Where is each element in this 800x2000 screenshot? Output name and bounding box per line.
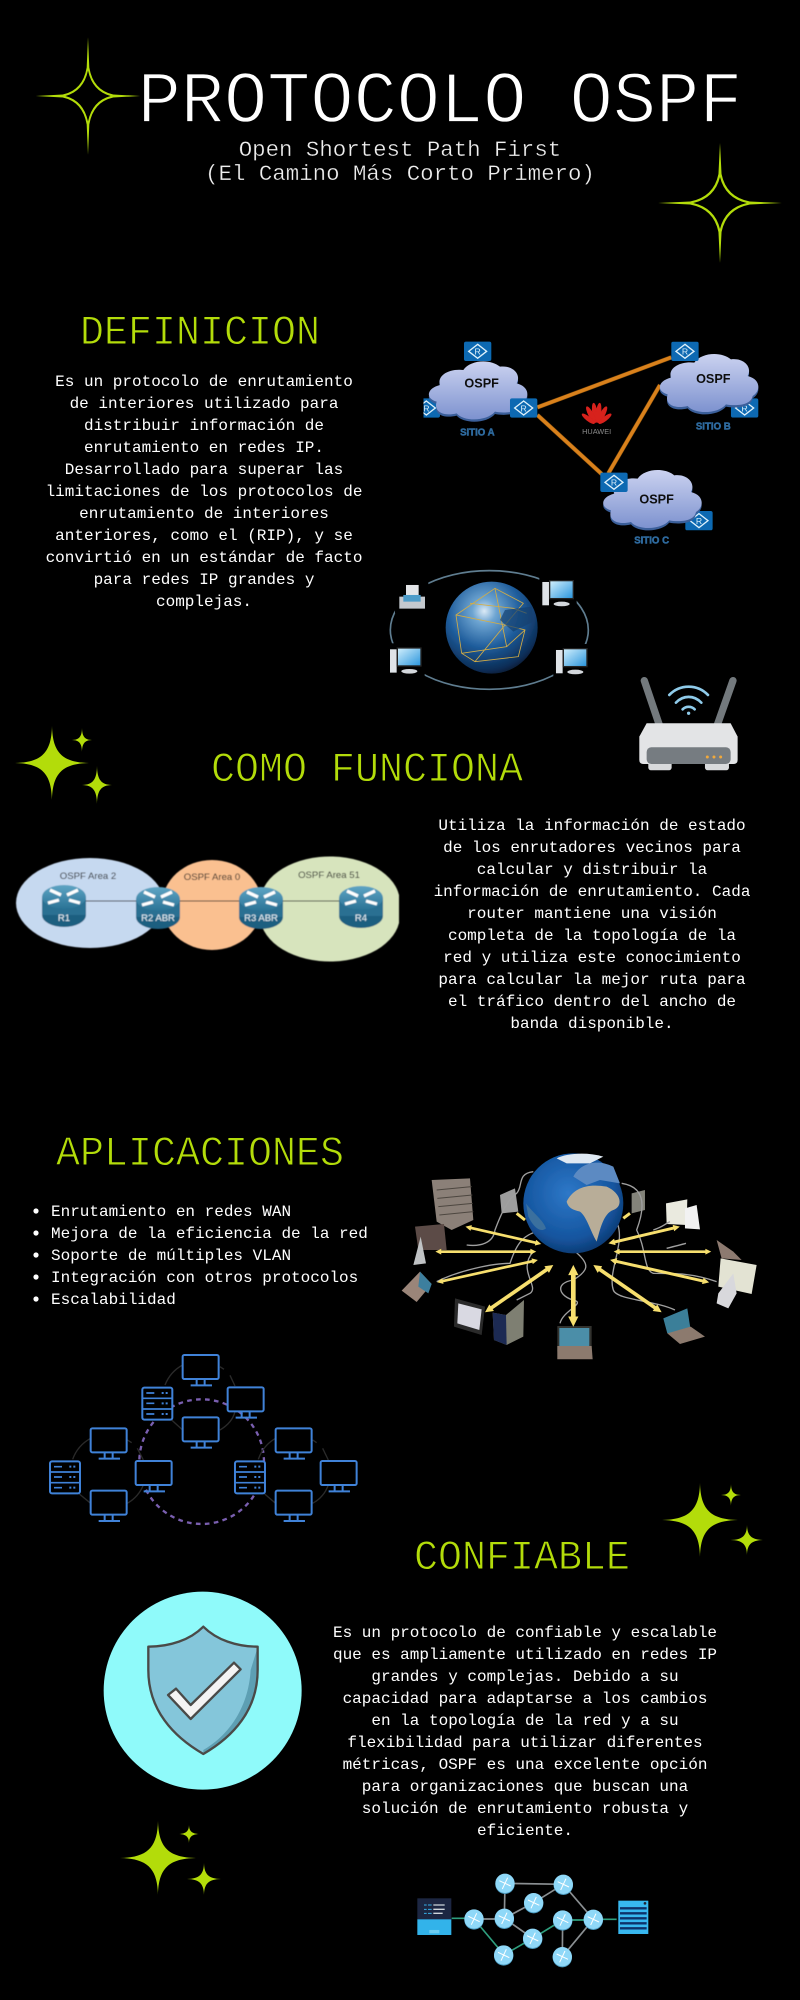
list: aplicaciones: Enrutamiento en redes WAN bbox=[51, 1203, 291, 1221]
diagram: OSPF sites network: SITIO C bbox=[634, 536, 669, 547]
text block: como funciona: Utiliza la información de estado bbox=[438, 817, 746, 835]
area 2 bbox=[16, 858, 164, 948]
text block: como funciona: banda disponible. bbox=[510, 1015, 674, 1033]
text block: como funciona: para calcular la mejor ruta para bbox=[438, 971, 746, 989]
subtitle: Open Shortest Path First bbox=[239, 137, 561, 163]
area 51 bbox=[260, 856, 399, 962]
text block: definicion: anteriores, como el (RIP), y se bbox=[55, 527, 353, 545]
diagram: OSPF sites network: OSPF bbox=[464, 376, 499, 390]
text block: confiable: que es ampliamente utilizado en redes IP bbox=[333, 1646, 717, 1664]
globe bbox=[523, 1153, 623, 1253]
icon: wifi router bbox=[639, 681, 738, 770]
diagram: OSPF areas: OSPF Area 0 bbox=[184, 872, 240, 883]
text block: definicion: para redes IP grandes y bbox=[94, 571, 315, 589]
text block: confiable bbox=[333, 1624, 717, 1840]
text block: confiable: Es un protocolo de confiable y escalable bbox=[333, 1624, 717, 1642]
diagram: OSPF sites network: OSPF bbox=[639, 493, 674, 507]
heading: definicion: DEFINICION bbox=[80, 310, 320, 357]
text block: confiable: capacidad para adaptarse a los cambios bbox=[343, 1690, 707, 1708]
text block: como funciona: el tráfico dentro del ancho de bbox=[448, 993, 736, 1011]
text block: como funciona: de los enrutadores vecinos para bbox=[443, 839, 741, 857]
text block: como funciona: información de enrutamiento. Cada bbox=[434, 883, 751, 901]
devices bbox=[432, 1178, 473, 1230]
text block: definicion: enrutamiento en redes IP. bbox=[84, 439, 324, 457]
heading: aplicaciones: APLICACIONES bbox=[56, 1131, 344, 1178]
text block: definicion: limitaciones de los protocolos de bbox=[46, 483, 362, 501]
subtitle bbox=[205, 137, 595, 187]
text block: definicion: convirtió en un estándar de facto bbox=[46, 549, 362, 567]
decorative star: top left outline bbox=[36, 37, 140, 155]
cables bbox=[437, 1172, 717, 1323]
text block: confiable: métricas, OSPF es una excelente opción bbox=[343, 1756, 707, 1774]
diagram: OSPF areas bbox=[16, 856, 399, 962]
arrows bbox=[438, 1213, 708, 1322]
heading: como funciona: COMO FUNCIONA bbox=[211, 747, 523, 794]
text block: confiable: para organizaciones que buscan una bbox=[362, 1778, 689, 1796]
diagram: OSPF areas: OSPF Area 2 bbox=[60, 871, 116, 882]
text block: confiable: en la topología de la red y a su bbox=[371, 1712, 679, 1730]
text block: definicion: Es un protocolo de enrutamiento bbox=[55, 373, 353, 391]
text block: como funciona bbox=[434, 817, 751, 1033]
text block: como funciona: red y utiliza este conocimiento bbox=[443, 949, 741, 967]
text block: confiable: solución de enrutamiento robusta y bbox=[362, 1800, 689, 1818]
diagram: OSPF sites network: OSPF bbox=[696, 372, 731, 386]
text block: definicion bbox=[46, 373, 362, 611]
text block: como funciona: completa de la topología de la bbox=[448, 927, 736, 945]
list: aplicaciones bbox=[33, 1203, 368, 1309]
laptop bbox=[417, 1898, 451, 1920]
text block: definicion: complejas. bbox=[156, 593, 252, 611]
list: aplicaciones: Integración con otros protocolos bbox=[51, 1269, 358, 1287]
heading: confiable: CONFIABLE bbox=[414, 1535, 630, 1582]
diagram: OSPF sites network: SITIO A bbox=[460, 427, 495, 438]
text block: confiable: eficiente. bbox=[477, 1822, 573, 1840]
text block: confiable: flexibilidad para utilizar diferentes bbox=[347, 1734, 703, 1752]
diagram: globe with connected computers bbox=[387, 571, 591, 689]
diagram: OSPF sites network: HUAWEI bbox=[582, 427, 611, 436]
text block: definicion: distribuir información de bbox=[84, 417, 324, 435]
diagram: OSPF areas: R3 ABR bbox=[244, 913, 278, 924]
sparkle cluster: bottom left bbox=[120, 1821, 221, 1895]
sparkle cluster: left of como funciona bbox=[15, 726, 112, 804]
text block: definicion: Desarrollado para superar las bbox=[65, 461, 343, 479]
icon: security shield bbox=[104, 1592, 302, 1790]
list: aplicaciones: Mejora de la eficiencia de la red bbox=[51, 1225, 368, 1243]
subtitle: (El Camino Más Corto Primero) bbox=[205, 161, 595, 187]
diagram: OSPF areas: R2 ABR bbox=[141, 913, 175, 924]
diagram: OSPF areas: R1 bbox=[58, 913, 70, 924]
text block: definicion: de interiores utilizado para bbox=[70, 395, 339, 413]
area 0 bbox=[162, 860, 262, 950]
diagram: packet routing network bbox=[417, 1874, 648, 1967]
text block: como funciona: calcular y distribuir la bbox=[477, 861, 708, 879]
text block: definicion: enrutamiento de interiores bbox=[79, 505, 329, 523]
list: aplicaciones: Soporte de múltiples VLAN bbox=[51, 1247, 291, 1265]
sparkle cluster: right of confiable bbox=[662, 1483, 764, 1557]
diagram: OSPF areas: OSPF Area 51 bbox=[298, 870, 360, 881]
diagram: client server network icons bbox=[50, 1355, 357, 1524]
diagram: OSPF areas: R4 bbox=[355, 913, 367, 924]
text block: como funciona: router mantiene una visión bbox=[467, 905, 717, 923]
text block: confiable: grandes y complejas. Debido a su bbox=[371, 1668, 679, 1686]
document bbox=[618, 1901, 648, 1934]
diagram: OSPF sites network: SITIO B bbox=[696, 422, 731, 433]
title: PROTOCOLO OSPF bbox=[138, 60, 742, 144]
diagram: OSPF sites network bbox=[413, 342, 758, 547]
decorative star: top right outline bbox=[658, 143, 782, 263]
list: aplicaciones: Escalabilidad bbox=[51, 1291, 176, 1309]
diagram: globe connected to devices bbox=[402, 1153, 757, 1359]
